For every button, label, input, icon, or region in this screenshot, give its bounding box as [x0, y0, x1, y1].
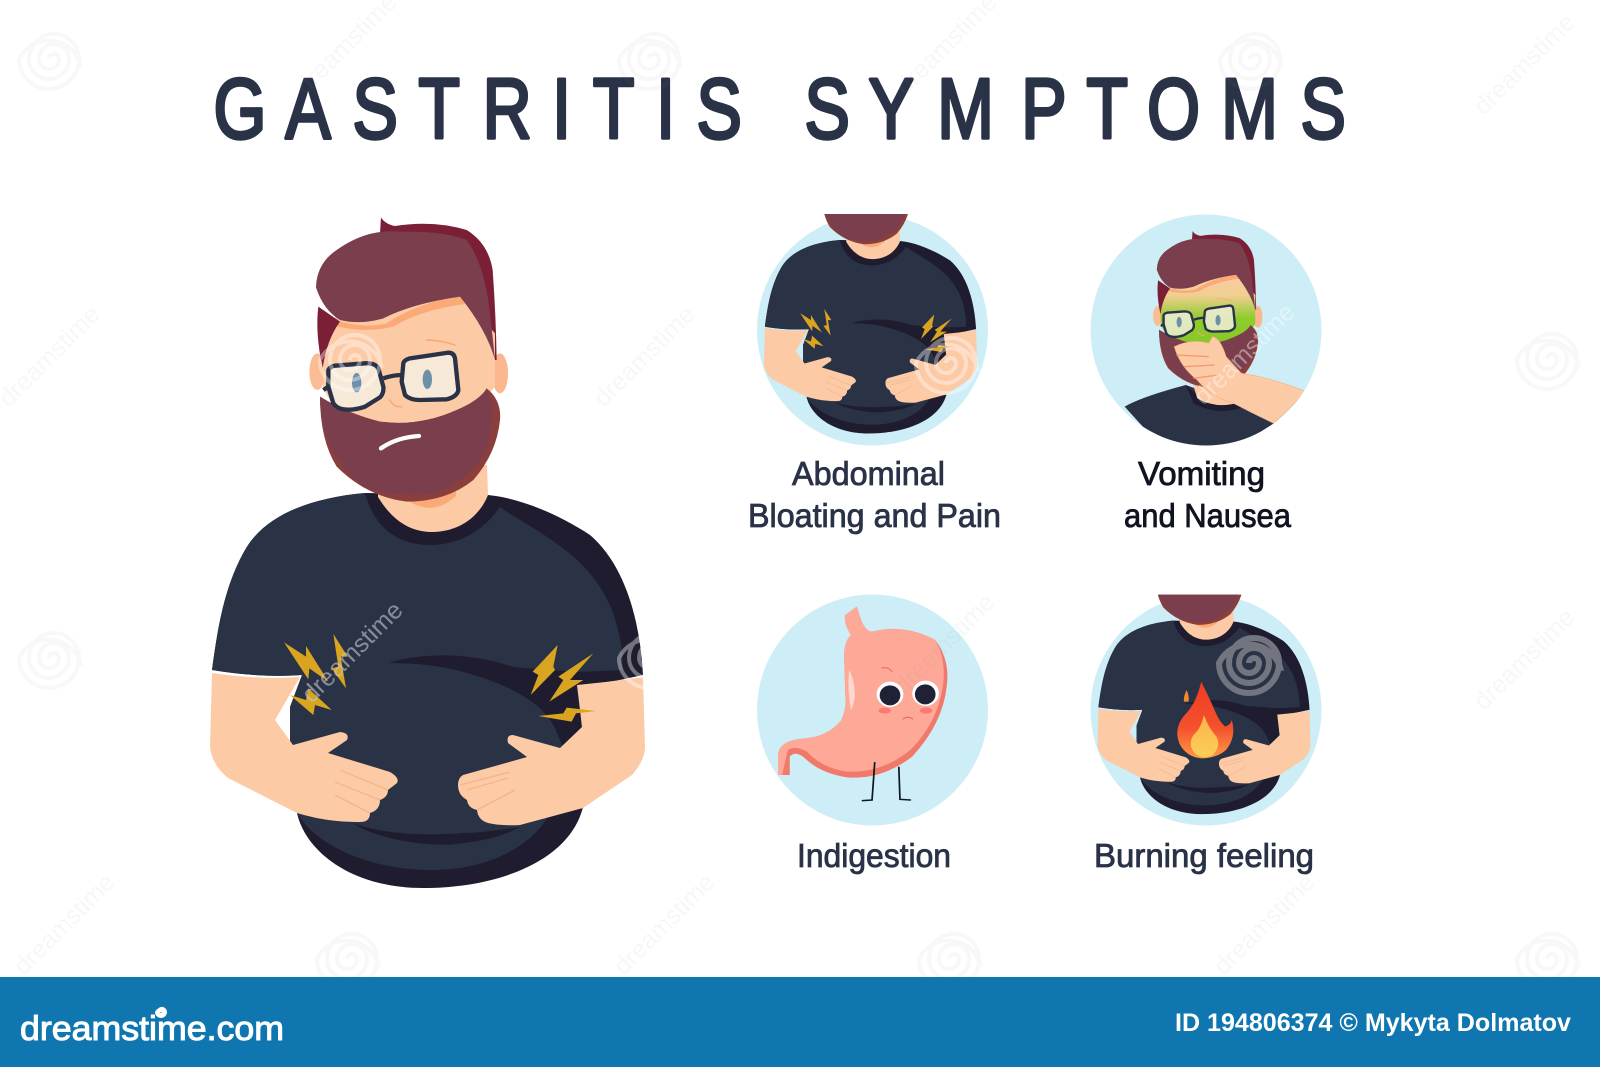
circle background	[757, 594, 988, 826]
label: vomiting and nausea: and Nausea	[1124, 497, 1292, 534]
watermark text: dreamstime	[296, 596, 408, 708]
flame icon	[1177, 682, 1233, 758]
watermark text: dreamstime	[1468, 603, 1580, 715]
label: abdominal bloating and pain: Abdominal	[792, 455, 945, 492]
cute stomach character	[778, 607, 947, 801]
green-faced head	[1153, 231, 1262, 388]
label: burning feeling: Burning feeling	[1094, 837, 1314, 874]
shoulders	[1125, 380, 1274, 447]
small torso figure	[764, 214, 977, 434]
hand over mouth	[1174, 337, 1306, 423]
watermark text: dreamstime	[608, 868, 720, 980]
panel: vomiting and nausea	[1090, 214, 1322, 447]
panel: burning feeling	[1090, 569, 1322, 826]
footer logo: dreamstime.com	[20, 1010, 284, 1048]
small torso figure	[1097, 569, 1311, 814]
circle background	[1090, 594, 1322, 826]
pain lightning bolts	[284, 634, 596, 722]
eyes	[877, 682, 903, 707]
circle background	[1090, 214, 1322, 446]
panel: indigestion	[757, 594, 988, 826]
footer bar	[0, 977, 1600, 1067]
watermark text: dreamstime	[888, 588, 1000, 700]
watermark text: dreamstime	[1208, 868, 1320, 980]
title: GASTRITIS SYMPTOMS	[214, 62, 1346, 157]
main figure: man holding stomach	[210, 217, 645, 888]
head with hair, beard and glasses	[309, 217, 508, 502]
watermark text: dreamstime	[1468, 8, 1580, 120]
watermark text: dreamstime	[8, 868, 120, 980]
legs	[862, 763, 910, 801]
label: abdominal bloating and pain: Bloating and Pain	[748, 497, 1001, 534]
torso and arms	[210, 465, 645, 888]
footer credit: ID 194806374 © Mykyta Dolmatov	[1175, 1009, 1571, 1037]
label: vomiting and nausea: Vomiting	[1138, 455, 1265, 492]
circle background	[757, 214, 988, 446]
panel: abdominal bloating and pain	[757, 189, 988, 445]
watermark text: dreamstime	[588, 300, 700, 412]
label: indigestion: Indigestion	[797, 837, 951, 874]
watermark text: dreamstime	[1188, 298, 1300, 410]
sick man clipped in circle	[1125, 231, 1306, 447]
